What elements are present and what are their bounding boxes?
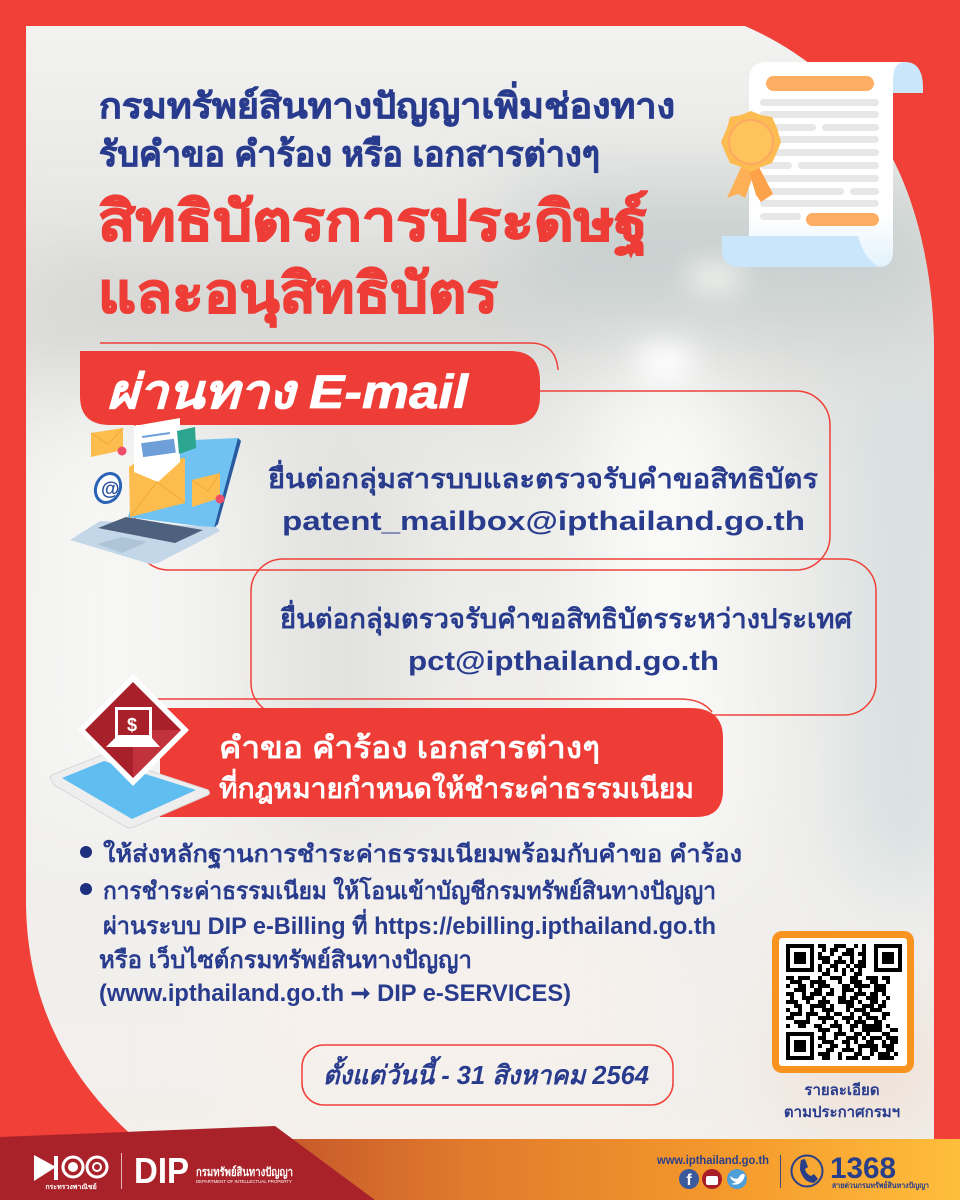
email: pct text [280, 599, 853, 676]
seal ribbon [727, 165, 756, 198]
website and social icons [656, 1153, 769, 1189]
website and social icons: www.ipthailand.go.th [656, 1153, 769, 1167]
hotline: 1368 [830, 1152, 896, 1185]
title: navy lines: รับคำขอ คำร้อง หรือ เอกสารต่างๆ [99, 135, 600, 174]
date pill: ตั้งแต่วันนี้ - 31 สิงหาคม 2564 [323, 1055, 650, 1090]
hotline: สายด่วนกรมทรัพย์สินทางปัญญา [832, 1180, 929, 1191]
email: patent mailbox text: ยื่นต่อกลุ่มสารบบและตรวจรับคำขอสิทธิบัตร [268, 459, 819, 496]
QR caption: รายละเอียด [804, 1082, 880, 1099]
icon: laptop with envelopes: @ [101, 479, 120, 500]
icon: tablet with payment diamond: $ [127, 715, 137, 735]
heading banner: e-mail: ผ่านทาง E-mail [107, 365, 469, 418]
icon: laptop with envelopes [70, 418, 241, 564]
outline behind e-mail heading [100, 343, 558, 370]
logo: DIP: DEPARTMENT OF INTELLECTUAL PROPERTY [196, 1179, 292, 1184]
heading banner: fees [160, 708, 723, 817]
heading banner: fees: คำขอ คำร้อง เอกสารต่างๆ [219, 732, 600, 765]
certificate illustration [721, 62, 923, 267]
footer gradient bar [200, 1139, 960, 1200]
heading banner: fees: ที่กฎหมายกำหนดให้ชำระค่าธรรมเนียม [219, 768, 694, 805]
heading banner: e-mail [80, 351, 540, 425]
email: pct text: ยื่นต่อกลุ่มตรวจรับคำขอสิทธิบัตรระหว่างประเทศ [280, 599, 853, 636]
bullet list: หรือ เว็บไซต์กรมทรัพย์สินทางปัญญา [99, 945, 472, 974]
email: patent mailbox text: patent_mailbox@ipthailand.go.th [282, 506, 805, 536]
bullet list: การชำระค่าธรรมเนียม ให้โอนเข้าบัญชีกรมทรัพย์สินทางปัญญา [103, 876, 716, 905]
title: navy lines [99, 81, 675, 174]
title: navy lines: กรมทรัพย์สินทางปัญญาเพิ่มช่องทาง [99, 81, 675, 127]
email: patent mailbox text [268, 459, 819, 536]
bullet list [80, 839, 742, 1007]
icon: tablet with payment diamond [50, 674, 210, 828]
date pill [302, 1045, 673, 1105]
seal [721, 111, 781, 172]
footer dark red wedge [0, 1126, 375, 1200]
logo: DIP [134, 1150, 293, 1191]
hotline [792, 1152, 929, 1191]
title: red lines [98, 190, 648, 328]
website and social icons: f [686, 1172, 692, 1189]
outline box: pct [251, 559, 876, 715]
title: red lines: สิทธิบัตรการประดิษฐ์ [98, 190, 648, 257]
outline box: patent mailbox [135, 391, 830, 570]
logo: DIP: DIP [134, 1150, 189, 1191]
QR caption: ตามประกาศกรมฯ [784, 1104, 900, 1121]
logo: MOC: กระทรวงพาณิชย์ [45, 1182, 97, 1191]
outline behind fee banner [150, 699, 712, 712]
bullet list: ผ่านระบบ DIP e-Billing ที่ https://ebilling.ipthailand.go.th [103, 908, 716, 940]
bullet list: (www.ipthailand.go.th ➞ DIP e-SERVICES) [99, 980, 571, 1007]
QR caption [784, 1082, 900, 1121]
bullet list: ให้ส่งหลักฐานการชำระค่าธรรมเนียมพร้อมกับคำขอ คำร้อง [103, 839, 742, 870]
QR code [772, 931, 914, 1073]
title: red lines: และอนุสิทธิบัตร [98, 262, 498, 328]
logo: MOC [34, 1155, 107, 1191]
email: pct text: pct@ipthailand.go.th [408, 646, 719, 676]
logo: DIP: กรมทรัพย์สินทางปัญญา [196, 1165, 293, 1179]
